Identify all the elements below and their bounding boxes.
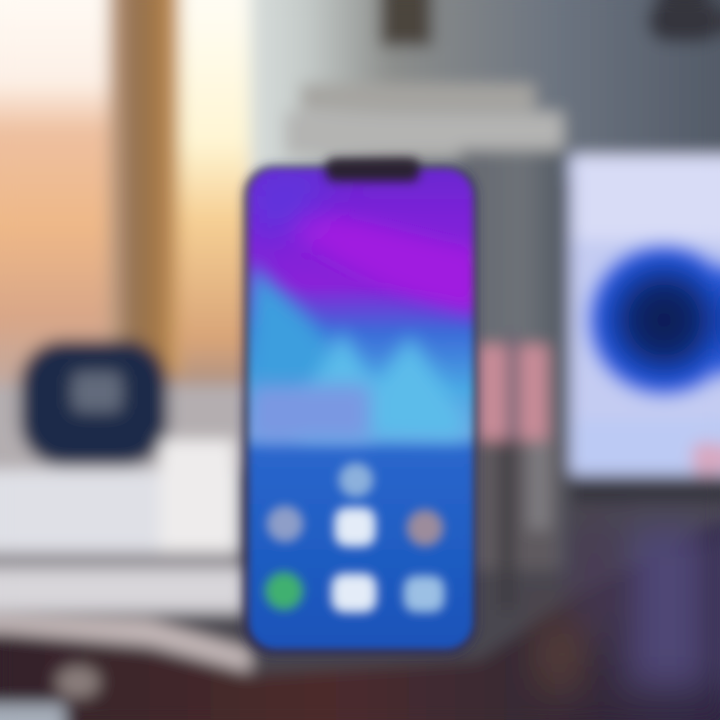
smartphone bbox=[244, 158, 480, 654]
phone notch bbox=[325, 158, 420, 182]
monitor with blue globe bbox=[570, 155, 720, 502]
white papers on desk bbox=[0, 440, 250, 672]
dark round object on left bbox=[20, 340, 168, 466]
phone screen bbox=[250, 170, 480, 648]
icon: blue globe bbox=[580, 236, 720, 404]
desk surface bbox=[0, 520, 720, 720]
app icons bbox=[265, 463, 444, 612]
gray cylinder behind phone bbox=[285, 84, 565, 610]
